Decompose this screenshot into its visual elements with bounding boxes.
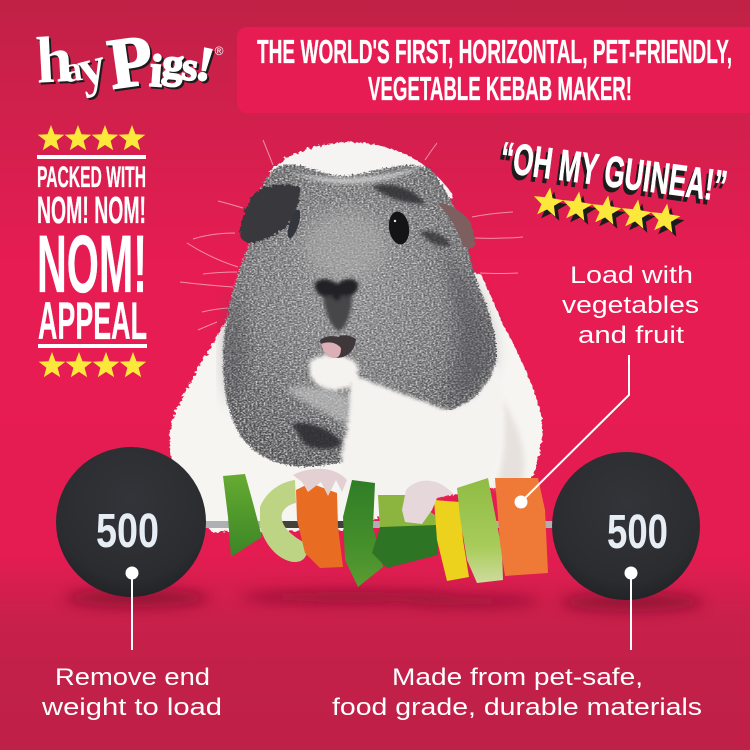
logo: hayPigs!: y <box>71 34 112 99</box>
logo: hayPigs!: s <box>179 43 201 90</box>
white chin patch <box>309 355 359 390</box>
green pepper 1 <box>223 474 262 557</box>
light bridge of face <box>303 211 387 279</box>
logo: hayPigs!: i <box>150 47 167 98</box>
guinea pig <box>170 142 542 532</box>
logo: hayPigs!: ! <box>194 39 220 94</box>
forehead streak <box>290 165 425 184</box>
right weight <box>552 452 700 600</box>
left badge: Packed with Nom! Nom! Nom! appeal: APPEAL <box>38 292 147 351</box>
callout text: materials <box>332 664 702 721</box>
whiskers <box>180 140 523 330</box>
logo: hayPigs!: h <box>36 25 77 100</box>
left badge: Packed with Nom! Nom! Nom! appeal: PACKED WITH <box>37 161 146 194</box>
right eye <box>387 210 411 246</box>
logo: hayPigs!: g <box>160 40 186 88</box>
callout leader: fruit <box>514 355 629 508</box>
pale fur below chin <box>285 386 350 425</box>
callout text: remove end weight: Remove end <box>55 664 210 691</box>
left badge: Packed with Nom! Nom! Nom! appeal <box>37 125 147 377</box>
right ear <box>437 203 475 247</box>
callout text: load with vegetables and fruit: and fruit <box>578 322 684 349</box>
yellow pepper <box>434 500 469 581</box>
white chest <box>340 362 503 500</box>
left eye <box>285 208 303 240</box>
pale green piece <box>378 495 437 530</box>
white body <box>170 273 542 532</box>
dark chest fur <box>292 423 342 449</box>
callout text: load with vegetables and fruit <box>562 262 699 349</box>
vegetable kebab <box>223 474 548 587</box>
logo: hayPigs!: g <box>162 42 188 90</box>
white head cap <box>270 142 453 215</box>
right weight: 500 <box>607 506 668 559</box>
callout text: materials: food grade, durable materials <box>332 694 702 721</box>
logo: hayPigs!: s <box>181 45 203 92</box>
nose <box>315 279 358 301</box>
header banner <box>237 27 750 113</box>
callout text: load with vegetables and fruit: Load with <box>570 262 693 289</box>
logo: hayPigs!: ! <box>192 37 218 92</box>
callout leader: remove weight <box>126 566 138 650</box>
carrot 1 <box>296 483 343 568</box>
logo: hayPigs!: P <box>105 21 160 107</box>
right paw <box>402 481 453 524</box>
dark forehead band <box>372 185 426 204</box>
top star row <box>38 125 145 150</box>
left weight <box>56 447 206 597</box>
left badge: Packed with Nom! Nom! Nom! appeal: NOM! NOM! <box>37 190 146 232</box>
callout text: load with vegetables and fruit: vegetables <box>562 292 699 319</box>
logo: hayPigs!: h <box>34 23 75 98</box>
callout leader: materials <box>624 566 638 650</box>
logo: hayPigs! <box>34 19 224 107</box>
right-side darker fur <box>440 250 492 405</box>
floor shadows <box>65 589 704 611</box>
logo: hayPigs!: P <box>103 19 158 105</box>
carrot 2 <box>495 478 548 576</box>
five stars <box>531 185 686 238</box>
muzzle stem <box>323 295 352 331</box>
dark green piece <box>372 525 438 568</box>
left ear <box>240 185 300 243</box>
body shading right <box>495 395 524 490</box>
logo: hayPigs!: ® <box>215 44 224 58</box>
grey head <box>223 165 496 467</box>
callout text: remove end weight: weight to load <box>41 694 222 721</box>
logo: hayPigs!: i <box>148 45 165 96</box>
mouth <box>320 335 356 358</box>
green pepper 2 <box>343 480 383 587</box>
celery 2 <box>457 478 503 583</box>
left badge: Packed with Nom! Nom! Nom! appeal: NOM! <box>37 219 147 310</box>
eye highlight <box>394 220 396 222</box>
left paw <box>293 469 347 496</box>
logo: hayPigs!: y <box>73 36 114 101</box>
logo: hayPigs!: a <box>63 50 87 92</box>
tongue <box>321 342 341 358</box>
skewer rod <box>204 521 554 528</box>
bottom star row <box>39 352 146 377</box>
callout text: remove end weight <box>41 664 222 721</box>
dark patch behind right eye <box>420 231 452 246</box>
logo: hayPigs!: a <box>61 48 85 90</box>
left weight: 500 <box>96 505 159 558</box>
left cheek shade <box>225 290 246 405</box>
callout text: materials: Made from pet-safe, <box>392 664 643 691</box>
celery ring <box>260 480 307 562</box>
